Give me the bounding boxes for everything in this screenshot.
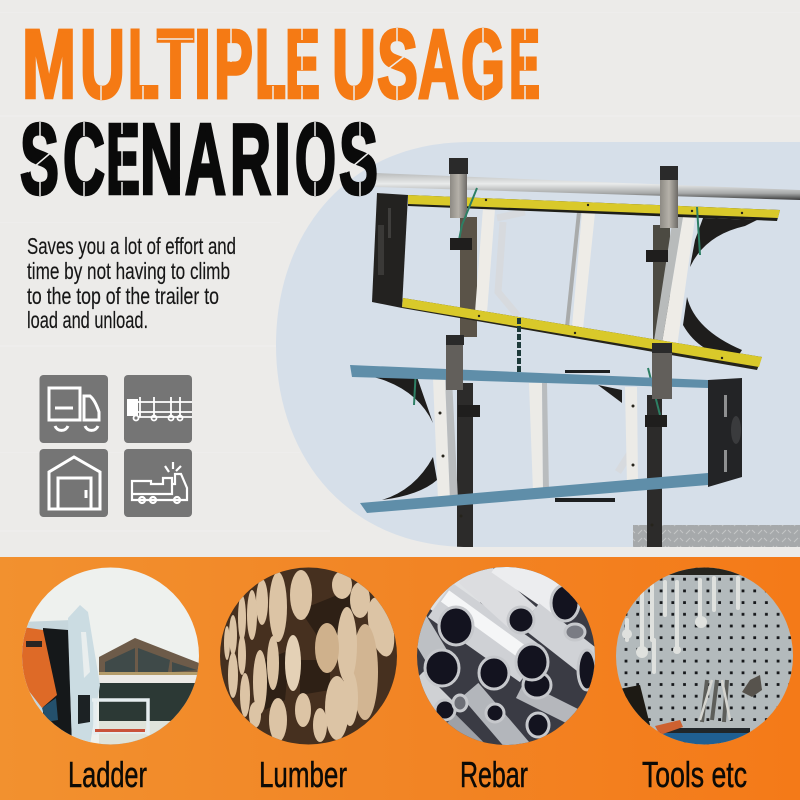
title line: scenarios: O [295, 104, 336, 216]
title [22, 10, 540, 118]
photo panel: ladders mounted on trailer wall [270, 140, 800, 550]
building [99, 638, 199, 745]
title line: scenarios: R [230, 104, 271, 216]
upper clamps [449, 158, 678, 228]
title line: multiple usage: M [22, 10, 76, 118]
yellow ladder rails [402, 195, 780, 370]
title line: multiple usage: U [332, 10, 376, 118]
text: E [509, 10, 540, 118]
title line: multiple usage: G [461, 10, 505, 118]
title line: multiple usage: L [255, 10, 286, 118]
hook brackets [450, 238, 668, 427]
van door and body [22, 620, 72, 745]
diamond plate [633, 525, 800, 548]
description text: load and unload. [27, 307, 148, 333]
icon: logging trailer [124, 375, 192, 443]
lower ladder foot [708, 378, 742, 487]
label: ladder: Ladder [68, 754, 147, 795]
blue ladder rails [350, 365, 708, 513]
black straps on blue ladder [555, 370, 615, 502]
label: tools etc: Tools etc [642, 754, 747, 795]
title line: scenarios: S [339, 104, 378, 216]
title line: multiple usage: E [285, 10, 320, 118]
bolts [438, 199, 743, 527]
vertical posts [457, 217, 670, 547]
wall rail [375, 173, 800, 200]
upper ladder foot [372, 193, 408, 308]
title line: scenarios: N [140, 104, 183, 216]
label: rebar: Rebar [460, 754, 528, 795]
icon: garage [40, 449, 108, 517]
description text: to the top of the trailer to [27, 283, 219, 309]
title line: multiple usage: L [128, 10, 159, 118]
title line: multiple usage: I [194, 10, 211, 118]
title line: multiple usage: U [80, 10, 125, 118]
title line: multiple usage: A [418, 10, 459, 118]
photo: tools on pegboard [614, 566, 796, 746]
lower clamps [446, 335, 672, 399]
lower ladder rungs [433, 378, 638, 500]
title line: scenarios: A [185, 104, 226, 216]
green straps and hooks [414, 188, 700, 415]
title line: multiple usage: S [377, 10, 418, 118]
description text: time by not having to climb [27, 258, 230, 284]
worker jacket [22, 627, 57, 708]
description text: Saves you a lot of effort and [27, 233, 236, 259]
black brackets [365, 218, 757, 500]
label: lumber: Lumber [259, 754, 347, 795]
title line: multiple usage: P [214, 10, 253, 118]
orange band [0, 557, 800, 800]
title line: scenarios [20, 104, 378, 216]
title line: scenarios: I [274, 104, 291, 216]
photo: metal tubes [417, 567, 595, 745]
description text [27, 233, 236, 333]
title line: scenarios: C [63, 104, 105, 216]
photo: ladder on van [20, 566, 202, 746]
title line: scenarios: E [106, 104, 140, 216]
chain [517, 318, 521, 372]
photo: lumber [218, 566, 400, 746]
folded ladder [92, 700, 148, 735]
rear ladder braces [497, 212, 632, 472]
icon: recovery truck [124, 449, 192, 517]
icon: delivery truck [40, 375, 108, 443]
title line: scenarios: S [20, 104, 59, 216]
title line: multiple usage: T [157, 10, 194, 118]
upper ladder rungs [475, 208, 695, 347]
